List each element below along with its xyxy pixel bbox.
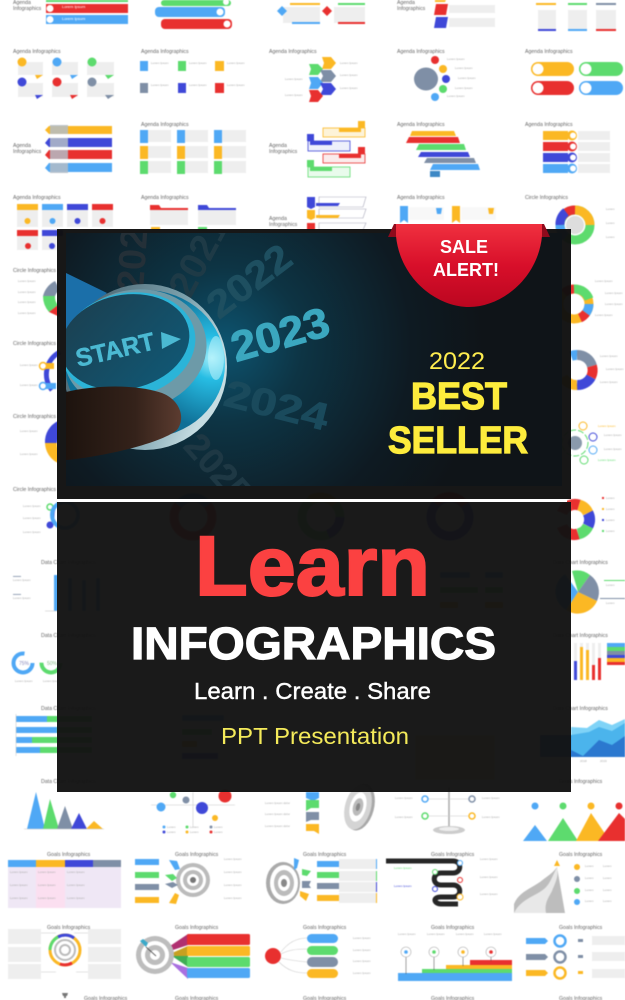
right side circle thumbnails: Lorem [606, 529, 615, 533]
row 11 thumbnails: Lorem Ipsum [67, 883, 85, 887]
row 12 thumbnails: Goals Infographics [175, 925, 219, 931]
row 3 thumbnails: Agenda Infographics [397, 195, 445, 201]
left side circle thumbnails: Lorem Ipsum [20, 383, 38, 387]
row 1 thumbnails: Lorem Ipsum [189, 83, 207, 87]
row 0 thumbnails: Agenda [397, 0, 415, 6]
row 12 thumbnails: Goals Infographics [559, 925, 603, 931]
panel: dark hero frame [57, 229, 571, 499]
row 12 thumbnails: Lorem Ipsum [353, 936, 371, 940]
subtitle: PPT Presentation [221, 723, 409, 749]
right side circle thumbnails: Lorem [606, 507, 615, 511]
panel: dark title block [57, 502, 571, 792]
row 11 thumbnails: Lorem [603, 876, 612, 880]
icon: play triangle [161, 332, 181, 349]
row 1 thumbnails: Agenda Infographics [269, 49, 317, 55]
row 1 thumbnails: Lorem Ipsum [285, 93, 303, 97]
row 3 thumbnails: Lorem [606, 221, 615, 225]
left side data chart thumbnails: 50% [47, 661, 58, 667]
right side circle thumbnails: Lorem Ipsum [606, 367, 624, 371]
left side data chart thumbnails: 75% [19, 661, 30, 667]
year: 2024: 2024 [220, 373, 333, 439]
right side data chart thumbnails: 2018 [580, 759, 587, 763]
divider line [57, 499, 567, 502]
row 1 thumbnails: Agenda Infographics [525, 49, 573, 55]
right side data chart thumbnails: Data Chart Infographics [553, 633, 608, 639]
row 1 thumbnails: Lorem Ipsum [455, 66, 473, 70]
right side circle thumbnails: Lorem Ipsum [605, 291, 623, 295]
row 10 thumbnails: Lorem [190, 825, 199, 829]
row 1 thumbnails: Lorem Ipsum [340, 73, 358, 77]
row 0 thumbnails: Lorem Ipsum [62, 16, 86, 21]
row 11 thumbnails: Lorem Ipsum [480, 875, 498, 879]
row 12 thumbnails: Lorem Ipsum [398, 932, 416, 936]
row 10 thumbnails: Lorem Ipsum [395, 796, 413, 800]
hero image: start button photo [66, 233, 484, 486]
right side circle thumbnails: Lorem Ipsum [595, 313, 613, 317]
right side data chart thumbnails: 2019 [600, 759, 607, 763]
row 0 thumbnails: Infographics [13, 6, 42, 12]
row 2 thumbnails: Agenda Infographics [141, 122, 189, 128]
row 1 thumbnails: Lorem Ipsum [151, 83, 169, 87]
row 2 thumbnails: Agenda [13, 143, 31, 149]
row 11 thumbnails: Lorem Ipsum [10, 883, 28, 887]
row 11 thumbnails: Lorem Ipsum [480, 892, 498, 896]
row 12 thumbnails [8, 925, 625, 981]
row 3 thumbnails: Agenda Infographics [13, 195, 61, 201]
right side circle thumbnails: Lorem Ipsum [598, 458, 616, 462]
row 3 thumbnails [13, 195, 615, 250]
row 2 thumbnails: Agenda Infographics [525, 122, 573, 128]
left side data chart thumbnails: Data Chart Infographics [41, 779, 96, 785]
left side circle thumbnails [13, 268, 60, 534]
row 12 thumbnails: Goals Infographics [431, 925, 475, 931]
left side circle thumbnails: Lorem Ipsum [18, 290, 36, 294]
row 12 thumbnails: Lorem Ipsum [353, 971, 371, 975]
row 1 thumbnails: Agenda Infographics [397, 49, 445, 55]
row 12 thumbnails: Lorem Ipsum [427, 932, 445, 936]
row 11 thumbnails: Lorem Ipsum [394, 884, 412, 888]
award text: 2022 best seller [388, 348, 528, 462]
heading: Learn: Learn [195, 519, 430, 613]
row 11 thumbnails: Goals Infographics [559, 852, 603, 858]
row 10 thumbnails: Lorem [190, 830, 199, 834]
row 0 thumbnails: Lorem Ipsum [62, 4, 86, 9]
right side circle thumbnails: Lorem Ipsum [595, 279, 613, 283]
row 11 thumbnails: Lorem Ipsum [224, 857, 242, 861]
left side data chart thumbnails: Lorem Ipsum [13, 596, 31, 600]
left side circle thumbnails: Lorem Ipsum [18, 311, 36, 315]
row 2 thumbnails: Agenda [269, 143, 287, 149]
best label: BEST [411, 376, 507, 418]
row 10 thumbnails: Lorem Ipsum [395, 815, 413, 819]
row 2 thumbnails [13, 121, 610, 177]
alert label: ALERT! [433, 259, 499, 280]
row 1 thumbnails: Lorem Ipsum [447, 94, 465, 98]
row 2 thumbnails: Infographics [269, 149, 298, 155]
ribbon: sale alert [388, 224, 550, 307]
right side circle thumbnails: Lorem Ipsum [605, 302, 623, 306]
ghost thumbnails behind dark panel [52, 497, 571, 780]
row 11 thumbnails: Goals Infographics [303, 852, 347, 858]
left side circle thumbnails: Lorem Ipsum [23, 516, 41, 520]
year label: 2022 [429, 348, 485, 375]
row 1 thumbnails: Lorem Ipsum [285, 77, 303, 81]
right side data chart thumbnails [553, 560, 625, 785]
row 1 thumbnails: Lorem Ipsum [227, 61, 245, 65]
button label: START [73, 328, 157, 373]
row 11 thumbnails: Lorem Ipsum [38, 883, 56, 887]
row 11 thumbnails: Lorem Ipsum [480, 857, 498, 861]
row 12 thumbnails: Lorem Ipsum [456, 932, 474, 936]
row 11 thumbnails: Lorem Ipsum [224, 896, 242, 900]
row 1 thumbnails: Agenda Infographics [141, 49, 189, 55]
row 11 thumbnails: Lorem Ipsum [10, 870, 28, 874]
row 1 thumbnails: Lorem Ipsum [227, 83, 245, 87]
row 1 thumbnails: Agenda Infographics [13, 49, 61, 55]
row 11 thumbnails: Lorem [585, 899, 594, 903]
left side data chart thumbnails: Data Chart Infographics [41, 633, 96, 639]
row 10 thumbnails: Lorem Ipsum dolor [265, 801, 290, 805]
row 11 thumbnails: Lorem [585, 876, 594, 880]
row 3 thumbnails: Lorem [606, 235, 615, 239]
row 12 thumbnails: Lorem Ipsum [353, 959, 371, 963]
row 12 thumbnails: Lorem Ipsum [484, 932, 502, 936]
row 1 thumbnails: Lorem Ipsum [189, 61, 207, 65]
row 11 thumbnails: Goals Infographics [175, 852, 219, 858]
row 12 thumbnails: Goals Infographics [303, 925, 347, 931]
row 11 thumbnails: Lorem [603, 888, 612, 892]
row 1 thumbnails: Lorem Ipsum [340, 86, 358, 90]
row 1 thumbnails: Lorem Ipsum [340, 61, 358, 65]
row 11 thumbnails: Lorem Ipsum [10, 896, 28, 900]
right side circle thumbnails: Lorem Ipsum [600, 380, 618, 384]
row 3 thumbnails: Agenda Infographics [141, 195, 189, 201]
left side circle thumbnails: Lorem Ipsum [20, 452, 38, 456]
right side circle thumbnails: Lorem [606, 518, 615, 522]
row 1 thumbnails: Lorem Ipsum [458, 76, 476, 80]
row 10 thumbnails: Lorem [214, 825, 223, 829]
year: 202 upper: 2021 [161, 210, 238, 304]
row 11 thumbnails: Lorem [603, 899, 612, 903]
year: 202 far top: 2021 [110, 205, 158, 293]
row 12 thumbnails: Goals Infographics [47, 925, 91, 931]
row 10 thumbnails: Lorem [167, 825, 176, 829]
right side data chart thumbnails: Lorem [606, 583, 615, 587]
left side circle thumbnails: Lorem Ipsum [20, 363, 38, 367]
row 11 thumbnails: Lorem Ipsum [67, 870, 85, 874]
row 11 thumbnails: Lorem [585, 888, 594, 892]
row 11 thumbnails: Lorem Ipsum [224, 883, 242, 887]
row 1 thumbnails: Lorem Ipsum [447, 57, 465, 61]
row 1 thumbnails: Lorem Ipsum [455, 86, 473, 90]
row 3 thumbnails: Lorem [606, 207, 615, 211]
row 2 thumbnails: Agenda Infographics [397, 122, 445, 128]
row 11 thumbnails [8, 852, 612, 913]
row 11 thumbnails: Lorem Ipsum [38, 870, 56, 874]
left side circle thumbnails: Circle Infographics [13, 268, 56, 274]
row 10 thumbnails: Lorem Ipsum [482, 815, 500, 819]
row 11 thumbnails: Lorem [603, 864, 612, 868]
right side data chart thumbnails: Data Chart Infographics [553, 560, 608, 566]
row 10 thumbnails [24, 780, 625, 841]
row 3 thumbnails: Infographics [269, 222, 298, 228]
left side data chart thumbnails: Lorem Ipsum [15, 679, 33, 683]
row 11 thumbnails: Lorem Ipsum [67, 896, 85, 900]
row 11 thumbnails: Lorem [585, 864, 594, 868]
left side circle thumbnails: Lorem Ipsum [20, 429, 38, 433]
tagline: Learn . Create . Share [194, 678, 431, 704]
left side circle thumbnails: Circle Infographics [13, 487, 56, 493]
heading: Infographics: INFOGRAPHICS [131, 618, 496, 669]
year: 202 lower: 2025 [176, 425, 260, 512]
row 11 thumbnails: Lorem Ipsum [394, 866, 412, 870]
left side circle thumbnails: Lorem Ipsum [18, 300, 36, 304]
right side data chart thumbnails: Goals Infographics [559, 779, 603, 785]
sale label: SALE [440, 236, 488, 257]
left side data chart thumbnails: Lorem Ipsum [13, 578, 31, 582]
row 13 thumbnails [62, 993, 603, 1000]
row 10 thumbnails: Lorem Ipsum [482, 796, 500, 800]
left side circle thumbnails: Circle Infographics [13, 414, 56, 420]
right side circle thumbnails: Lorem Ipsum [598, 424, 616, 428]
row 11 thumbnails: Goals Infographics [431, 852, 475, 858]
right side data chart thumbnails: Lorem [606, 601, 615, 605]
right side circle thumbnails: Lorem Ipsum [604, 447, 622, 451]
row 10 thumbnails: Lorem Ipsum dolor [265, 824, 290, 828]
row 0 thumbnails: Agenda [13, 0, 31, 6]
right side circle thumbnails [559, 279, 624, 535]
icon: start button [66, 284, 227, 450]
row 0 thumbnails [13, 0, 616, 31]
row 11 thumbnails: Lorem Ipsum [224, 870, 242, 874]
right side circle thumbnails: Lorem Ipsum [600, 354, 618, 358]
row 2 thumbnails: Infographics [13, 149, 42, 155]
row 0 thumbnails: Infographics [397, 6, 426, 12]
row 1 thumbnails [13, 49, 623, 102]
year: 2023: 2023 [226, 298, 335, 371]
icon: finger [66, 386, 181, 460]
row 3 thumbnails: Circle Infographics [525, 195, 568, 201]
left side data chart thumbnails: Data Chart Infographics [41, 706, 96, 712]
left side data chart thumbnails: Data Chart Infographics [41, 560, 96, 566]
right side data chart thumbnails: Data Chart Infographics [553, 706, 608, 712]
row 10 thumbnails: Lorem [167, 830, 176, 834]
left side data chart thumbnails [13, 560, 96, 785]
left side circle thumbnails: Lorem Ipsum [23, 504, 41, 508]
right side circle thumbnails: Lorem [606, 496, 615, 500]
row 11 thumbnails: Lorem Ipsum [38, 896, 56, 900]
left side circle thumbnails: Lorem Ipsum [23, 530, 41, 534]
left side data chart thumbnails: Lorem Ipsum [43, 679, 61, 683]
row 10 thumbnails: Lorem Ipsum dolor [265, 812, 290, 816]
year: 2022: 2022 [199, 236, 300, 327]
icon: blue light wedge [66, 273, 107, 330]
right side circle thumbnails: Lorem Ipsum [604, 433, 622, 437]
row 10 thumbnails: Lorem [214, 830, 223, 834]
row 12 thumbnails: Lorem Ipsum [353, 948, 371, 952]
row 3 thumbnails: Agenda [269, 216, 287, 222]
left side circle thumbnails: Circle Infographics [13, 341, 56, 347]
row 1 thumbnails: Lorem Ipsum [151, 61, 169, 65]
left side circle thumbnails: Lorem Ipsum [18, 279, 36, 283]
row 11 thumbnails: Goals Infographics [47, 852, 91, 858]
seller label: SELLER [388, 420, 528, 462]
